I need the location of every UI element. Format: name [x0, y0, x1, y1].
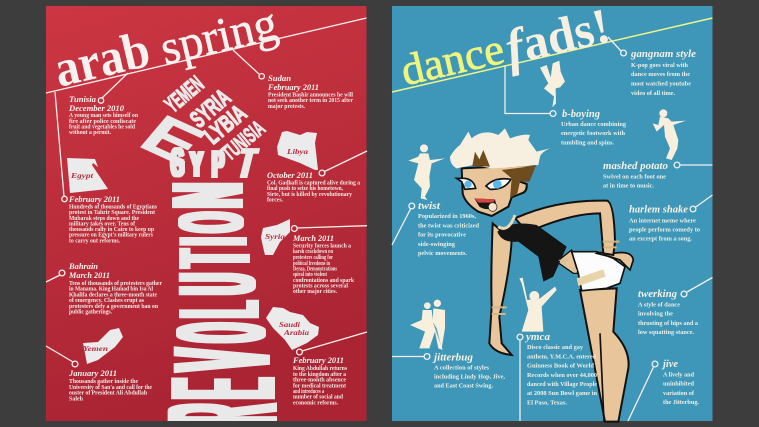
fist typography: finger countries: SYRIA: [185, 84, 236, 133]
event: saudi arabia february 2011: for medical treatment: [293, 382, 347, 389]
entry: mashed potato: mashed potato: [603, 161, 668, 172]
event: yemen january 2011: [46, 346, 152, 402]
title: dance fads: f: [500, 17, 534, 78]
entry: twist: the twist was criticized: [418, 222, 479, 230]
entry: ymca: at 2008 Sun Bowl game in: [527, 390, 597, 397]
fist typography: revolution: V: [144, 348, 300, 371]
entry: mashed potato: Swivel on each foot one: [603, 174, 666, 180]
entry: twerking: low squatting stance.: [638, 329, 694, 336]
entry: b-boying: [505, 66, 627, 146]
fist typography: egypt thumb and knuckles: G: [171, 138, 184, 186]
fist typography: finger countries: YEMEN: [160, 71, 208, 117]
entry: gangnam style: K-pop goes viral with: [631, 62, 688, 69]
entry: twerking: twerking: [638, 289, 677, 300]
event: saudi arabia february 2011: and introduces a: [293, 388, 325, 395]
entry: b-boying: b-boying: [562, 109, 600, 120]
panel: arab spring: [46, 0, 367, 425]
event: syria march 2011: harsh crackdown on: [293, 248, 333, 255]
fist typography: egypt thumb and knuckles: Y: [190, 144, 203, 184]
event: bahrain: public gatherings.: [69, 308, 112, 316]
fist typography: egypt thumb and knuckles: [128, 103, 260, 187]
event: egypt february 2011: February 2011: [68, 195, 120, 204]
event: egypt february 2011: protest in Tahrir Square. President: [69, 209, 156, 216]
event: egypt february 2011: [55, 92, 157, 244]
event: libya october 2011: Sirte, but is killed by revolutionary: [267, 191, 353, 198]
entry: twerking: [638, 278, 712, 336]
event: sudan: [233, 50, 353, 110]
entry: jive: [628, 359, 699, 421]
fist typography: revolution: E: [139, 378, 308, 399]
entry: twist: twist: [418, 201, 441, 212]
icon: twist silhouette: [408, 144, 445, 200]
fist typography: egypt thumb and knuckles: T: [234, 140, 260, 187]
entry: gangnam style: dance moves from the: [631, 71, 690, 78]
map: egypt: [67, 158, 108, 193]
map: saudi arabia: Saudi: [279, 320, 301, 329]
fist typography: revolution: T: [157, 250, 272, 267]
entry: b-boying: Urban dance combining: [561, 121, 627, 128]
entry: gangnam style: video of all time.: [631, 90, 675, 97]
fist typography: revolution: I: [159, 238, 269, 245]
event: sudan: not seek another term in 2015 after: [268, 97, 353, 104]
event: libya october 2011: forces.: [267, 196, 283, 204]
entry: gangnam style: gangnam style: [630, 49, 696, 60]
icon: ymca silhouette: [519, 278, 557, 332]
event: libya october 2011: [267, 151, 367, 204]
entry: jive: the Jitterbug.: [663, 399, 699, 406]
event: syria march 2011: political freedoms in: [293, 260, 330, 267]
event: egypt february 2011: Mubarak steps down and the: [69, 215, 139, 222]
entry: harlem shake: harlem shake: [629, 204, 688, 216]
event: bahrain: March 2011: [68, 271, 110, 280]
event: sudan: February 2011: [267, 83, 319, 92]
icon: jitterbug couple silhouette: [410, 300, 445, 350]
map: syria: [261, 219, 290, 255]
event: bahrain: protesters defy a government ban on: [69, 303, 158, 310]
title: arab spring: [46, 0, 366, 99]
entry: jitterbug: including Lindy Hop, Jive,: [434, 374, 505, 380]
map: yemen: Yemen: [83, 344, 108, 353]
event: egypt february 2011: thousands rally in Cairo to keep up: [69, 226, 154, 233]
fist typography: revolution: R: [135, 404, 312, 424]
event: syria march 2011: March 2011: [292, 234, 334, 243]
entry: b-boying: tumbling and spins.: [561, 140, 614, 146]
entry: harlem shake: people perform comedy to: [629, 226, 701, 234]
title: dance fads: [392, 0, 712, 95]
event: yemen january 2011: Thousands gather inside the: [69, 378, 138, 385]
event: egypt february 2011: to carry out reforms.: [69, 237, 120, 244]
event: egypt february 2011: military takes over. Tens of: [69, 220, 136, 228]
event: egypt february 2011: pressure on Egypt's military rulers: [69, 232, 153, 238]
event: bahrain: of emergency. Clashes erupt as: [69, 297, 144, 304]
event: bahrain: Khalifa declares a three-month state: [69, 292, 157, 298]
event: saudi arabia february 2011: to the kingdom after a: [293, 371, 347, 378]
event: syria march 2011: confrontations and spark: [293, 277, 354, 284]
event: libya october 2011: final push to seize his hometown,: [267, 185, 343, 192]
fist typography: egypt thumb and knuckles: P: [212, 144, 224, 186]
entry: twist: for its provocative: [418, 232, 466, 238]
entry: ymca: anthem, Y.M.C.A. entered: [527, 354, 596, 360]
map: libya: [277, 131, 318, 170]
fist typography: revolution: O: [160, 212, 263, 232]
entry: jive: A lively and: [663, 372, 694, 378]
event: bahrain: [46, 262, 162, 316]
event: egypt february 2011: Hundreds of thousands of Egyptians: [69, 204, 157, 210]
event: tunisia: December 2010: [68, 104, 125, 113]
entry: harlem shake: an excerpt from a song.: [629, 236, 692, 242]
event: syria march 2011: other major cities.: [293, 288, 337, 295]
entry: twist: Popularized in 1960s,: [418, 213, 476, 220]
entry: twist: side-swinging: [418, 241, 456, 248]
fist typography: revolution: L: [154, 301, 284, 318]
title: arab spring: arab: [49, 21, 155, 99]
icon: b-boy silhouette: [540, 61, 565, 107]
event: syria march 2011: Security forces launch a: [293, 242, 352, 250]
event: saudi arabia february 2011: three-month absence: [293, 376, 346, 384]
map: egypt: Egypt: [70, 171, 94, 180]
entry: jitterbug: jitterbug: [432, 352, 473, 364]
entry: twerking: involving the: [638, 310, 673, 318]
entry: jive: jive: [661, 359, 678, 370]
entry: twerking: thrusting of hips and a: [638, 320, 699, 327]
entry: twerking: A style of dance: [638, 302, 680, 308]
event: saudi arabia february 2011: King Abdullah returns: [293, 365, 347, 372]
entry: jive: uninhibited: [663, 380, 694, 388]
entry: ymca: Records when over 44,000: [527, 372, 598, 379]
event: sudan: Sudan: [268, 74, 291, 83]
event: saudi arabia february 2011: February 2011: [292, 356, 344, 365]
event: sudan: major protests.: [268, 103, 305, 110]
map: saudi arabia: [266, 307, 319, 350]
entry: mashed potato: at in time to music.: [603, 182, 654, 190]
event: bahrain: Bahrain: [68, 262, 98, 271]
event: syria march 2011: [291, 226, 367, 295]
event: syria march 2011: spiral into violent: [293, 271, 328, 278]
fist typography: finger countries: TUNISIA: [217, 115, 270, 165]
fist typography: egypt thumb and knuckles: E: [128, 103, 218, 176]
entry: jive: variation of: [663, 390, 695, 397]
entry: ymca: ymca: [524, 332, 550, 343]
fist typography: revolution: N: [151, 183, 266, 208]
event: bahrain: Tens of thousands of protesters gather: [69, 280, 162, 287]
panel: dance fads: [392, 0, 712, 422]
event: yemen january 2011: January 2011: [68, 369, 117, 378]
event: tunisia: fruit and vegetables he sold: [69, 123, 135, 130]
entry: jitterbug: [392, 352, 505, 390]
fist typography: finger countries: LYBIA: [199, 100, 252, 150]
entry: ymca: Guinness Book of World: [527, 362, 594, 370]
entry: gangnam style: most watched youtube: [631, 80, 691, 88]
event: bahrain: in Manama. King Hamad bin Isa Al: [69, 286, 153, 292]
fist typography: revolution: O: [151, 323, 293, 342]
character: dancing cartoon woman: [450, 128, 633, 422]
fist typography: revolution: U: [157, 273, 280, 294]
entry: harlem shake: [629, 195, 712, 242]
entry: harlem shake: An internet meme where: [629, 218, 696, 224]
event: saudi arabia february 2011: [292, 332, 367, 406]
event: libya october 2011: Col. Gadhafi is captured alive during a: [267, 180, 361, 186]
entry: jitterbug: and East Coast Swing.: [434, 382, 493, 390]
entry: b-boying: energetic footwork with: [561, 130, 625, 137]
title: dance fads: dance: [396, 24, 509, 95]
event: tunisia: Tunisia: [69, 95, 96, 104]
icon: mashed potato silhouette: [653, 109, 686, 160]
event: libya october 2011: October 2011: [267, 171, 313, 180]
event: tunisia: A young man sets himself on: [69, 112, 138, 119]
fist typography: finger countries: [160, 71, 270, 165]
entry: ymca: [517, 332, 598, 421]
event: syria march 2011: protesters calling for: [293, 254, 333, 261]
event: saudi arabia february 2011: number of social and: [293, 394, 343, 401]
event: yemen january 2011: University of San'a and call for the: [69, 384, 152, 391]
map: yemen: [83, 328, 123, 364]
entry: twist: [392, 201, 479, 257]
event: tunisia: fire after police confiscate: [69, 118, 136, 125]
entry: ymca: Disco classic and gay: [527, 344, 584, 351]
entry: ymca: El Paso, Texas.: [527, 400, 567, 406]
event: syria march 2011: protests across several: [293, 282, 348, 290]
entry: twist: pelvic movements.: [418, 250, 467, 257]
event: sudan: President Bashir announces he will: [268, 92, 353, 98]
event: tunisia: [68, 73, 138, 136]
entry: gangnam style: [608, 37, 696, 97]
entry: ymca: danced with Village People: [527, 381, 597, 388]
event: yemen january 2011: ouster of President Ali Abdullah: [69, 390, 147, 396]
event: yemen january 2011: Saleh: [69, 395, 83, 402]
event: saudi arabia february 2011: economic reforms.: [293, 400, 338, 406]
event: tunisia: without a permit.: [69, 129, 111, 136]
entry: jitterbug: A collection of styles: [434, 364, 489, 372]
map: saudi arabia: Arabia: [283, 328, 309, 337]
fist typography: revolution: [168, 182, 277, 421]
entry: mashed potato: [603, 161, 712, 190]
event: syria march 2011: Deraa. Demonstrations: [293, 266, 337, 272]
map: syria: Syria: [265, 232, 285, 241]
map: libya: Libya: [286, 147, 308, 156]
